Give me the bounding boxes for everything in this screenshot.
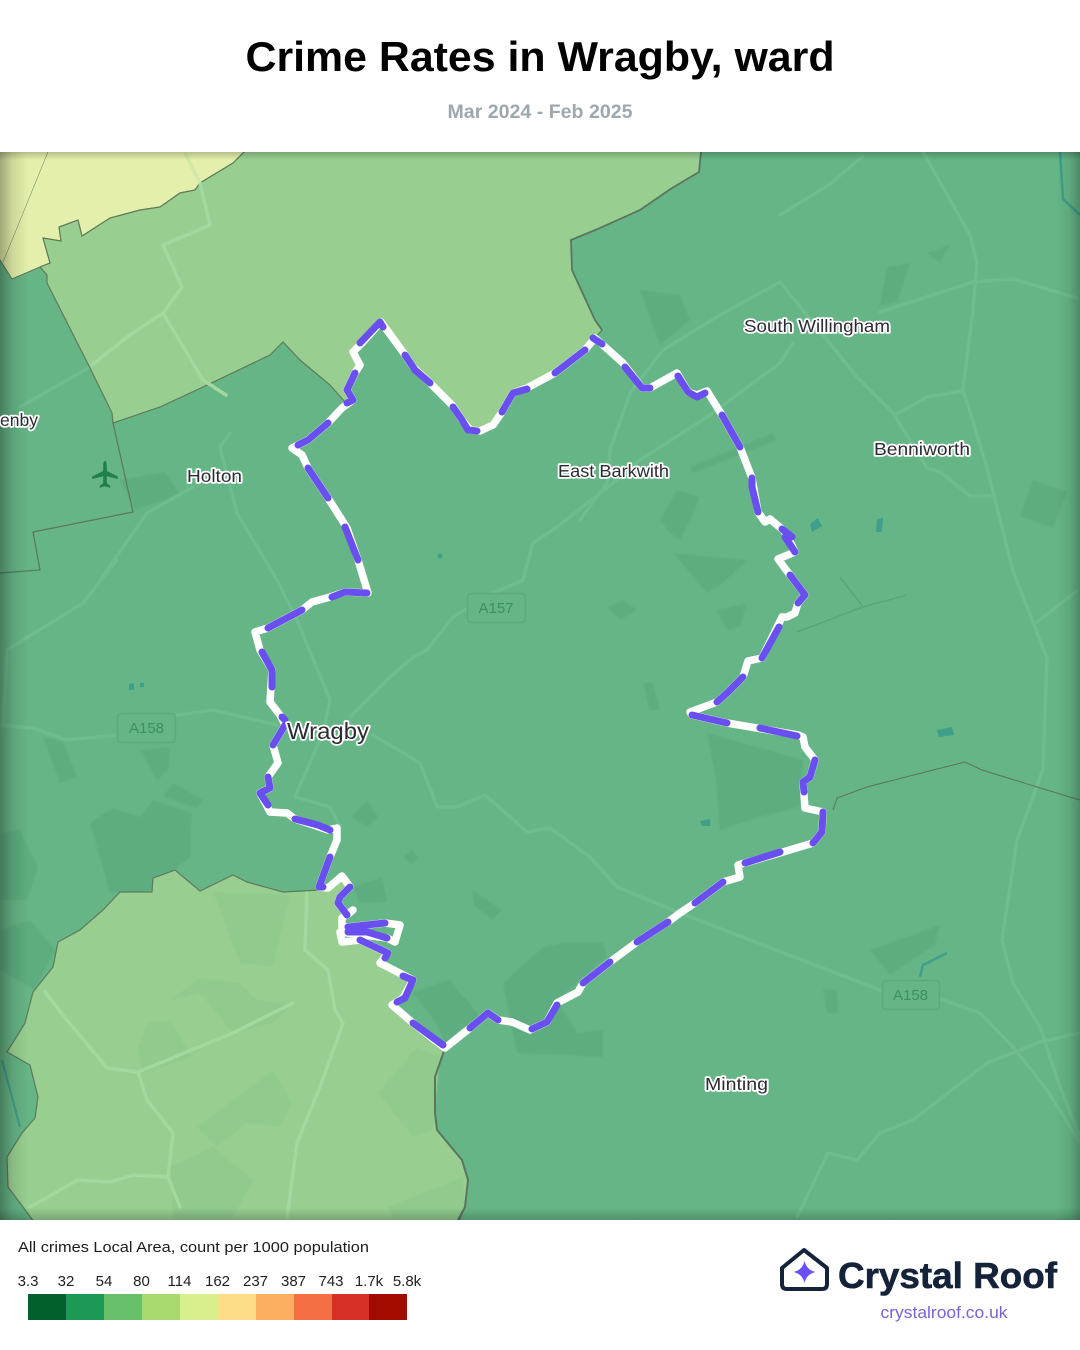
legend labels: 3.3 xyxy=(18,1273,38,1290)
legend labels: 162 xyxy=(205,1273,230,1290)
edge vignette xyxy=(0,152,1080,1220)
legend labels: 80 xyxy=(133,1273,150,1290)
place label: Holton: Holton xyxy=(187,466,242,486)
legend title: All crimes Local Area, count per 1000 population xyxy=(18,1239,369,1256)
legend labels: 5.8k xyxy=(393,1273,422,1290)
legend labels: 114 xyxy=(168,1273,191,1290)
outline dashes: purple xyxy=(260,322,823,1045)
legend xyxy=(18,1239,422,1320)
road label: A158 east xyxy=(882,980,940,1010)
legend labels: 54 xyxy=(96,1273,112,1290)
road label: A157 xyxy=(468,594,526,622)
roads on light wards xyxy=(30,183,343,1218)
area: light green southern ward xyxy=(7,870,468,1230)
title: Crime Rates in Wragby, ward xyxy=(246,33,834,80)
place label: East Barkwith: East Barkwith xyxy=(558,461,669,481)
place label: South Willingham: South Willingham xyxy=(744,316,890,336)
legend labels: 743 xyxy=(318,1273,344,1290)
water details xyxy=(2,152,1080,1127)
outline base: white xyxy=(255,322,823,1048)
road label: A158 west: A158 xyxy=(129,720,164,737)
choropleth map xyxy=(0,152,1080,1220)
legend colour scale xyxy=(28,1294,407,1320)
place label: Wragby: Wragby xyxy=(287,718,370,744)
darker patches in southern ward xyxy=(137,892,465,1218)
ward outline: Wragby xyxy=(255,322,823,1048)
legend labels xyxy=(18,1273,422,1290)
ward boundaries xyxy=(0,152,1080,1220)
woodland patches on green wards xyxy=(0,245,1067,1057)
thin hedgerow line xyxy=(797,577,907,632)
roads on green wards xyxy=(0,152,1080,1217)
website link: crystalroof.co.uk xyxy=(880,1304,1008,1322)
base area: mid green wards xyxy=(0,152,1080,1220)
place label: Minting: Minting xyxy=(705,1074,768,1094)
legend labels: 32 xyxy=(58,1273,74,1290)
logo: Crystal Roof xyxy=(782,1250,1058,1322)
area: yellow north-west ward xyxy=(0,140,256,279)
road on yellow ward xyxy=(185,153,200,183)
area: light green northern ward xyxy=(40,140,702,431)
date range subtitle: Mar 2024 - Feb 2025 xyxy=(448,102,633,123)
road label: A158 east: A158 xyxy=(893,987,928,1004)
header xyxy=(246,33,834,123)
legend labels: 387 xyxy=(281,1273,306,1290)
icon: house with star xyxy=(782,1250,827,1289)
place label: partial enby: enby xyxy=(0,410,38,430)
wordmark: Crystal Roof xyxy=(838,1255,1058,1296)
place label: Benniworth: Benniworth xyxy=(874,439,970,459)
legend labels: 1.7k xyxy=(355,1273,384,1290)
road label: A157: A157 xyxy=(478,600,514,617)
icon: airport xyxy=(92,461,118,488)
footer xyxy=(18,1239,1058,1322)
legend labels: 237 xyxy=(243,1273,268,1290)
road label: A158 west xyxy=(118,714,176,742)
